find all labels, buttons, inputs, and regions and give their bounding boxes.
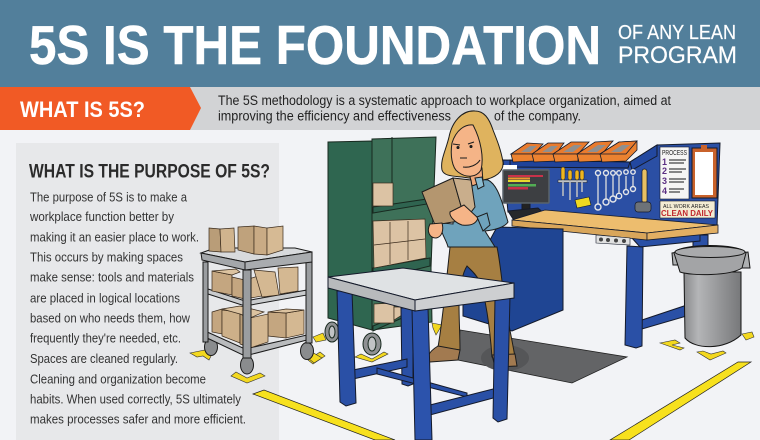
- definition text: The 5S methodology is a systematic approach to workplace organization, aimed at: [218, 93, 671, 108]
- workbench: [463, 141, 720, 348]
- shelf side panel: [328, 141, 372, 330]
- clipboard: [692, 145, 717, 198]
- subtitle: OF ANY LEAN: [618, 21, 736, 44]
- cart top shelf: [201, 248, 312, 270]
- process poster: 4: [662, 186, 667, 196]
- metal cart with boxes: [201, 226, 314, 374]
- pegboard: [503, 143, 720, 226]
- yellow floor corner markers: [190, 323, 754, 383]
- grey trash can: [672, 246, 750, 347]
- trousers: [438, 247, 515, 357]
- panel body text: are placed in logical locations: [30, 292, 180, 306]
- power strip: [596, 235, 630, 245]
- tape measure: [575, 197, 591, 208]
- panel body text: frequently they're needed, etc.: [30, 332, 181, 346]
- panel body text: making it an easier place to work.: [30, 230, 199, 244]
- process poster: [660, 147, 689, 199]
- title: 5S IS THE FOUNDATION: [29, 14, 601, 76]
- subtitle: [618, 21, 737, 69]
- keyboard: [508, 208, 547, 222]
- orange parts trays: [511, 141, 637, 162]
- cart casters: [204, 338, 314, 374]
- right cuff: [477, 213, 490, 231]
- yellow floor tape lines: [253, 362, 751, 440]
- cart lower shelf: [205, 331, 307, 356]
- computer monitor: [503, 165, 549, 210]
- neck: [469, 168, 483, 186]
- screwdrivers on rack: [558, 167, 587, 200]
- clean daily sign: ALL WORK AREAS: [663, 204, 709, 210]
- definition text: [218, 93, 671, 124]
- woman holding box: [422, 111, 517, 367]
- hammer: [635, 169, 651, 212]
- clean daily sign: CLEAN DAILY: [661, 209, 714, 218]
- cart lower shelf boxes: [212, 306, 304, 348]
- orange arrow label: [0, 87, 201, 130]
- can lid: [674, 246, 746, 275]
- cart top boxes: [209, 226, 283, 255]
- panel body text: habits. When used correctly, 5S ultimately: [30, 392, 242, 406]
- cart posts: [203, 262, 312, 358]
- panel heading: WHAT IS THE PURPOSE OF 5S?: [29, 162, 270, 182]
- face: [451, 125, 482, 176]
- definition text: improving the efficiency and effectiveness: [218, 108, 451, 124]
- blue bench cabinet: [463, 227, 563, 331]
- header banner: [0, 0, 760, 87]
- shoes: [428, 346, 517, 367]
- wrenches: [595, 170, 636, 210]
- panel body text: workplace function better by: [29, 210, 175, 224]
- shelf cardboard boxes: [373, 183, 426, 323]
- cart middle shelf: [208, 289, 307, 306]
- blue shirt: [442, 179, 508, 247]
- definition text: of the company.: [494, 108, 581, 124]
- collar: [475, 177, 484, 189]
- panel: purpose of 5S: [16, 143, 279, 440]
- floor mat: [458, 330, 627, 383]
- clean daily sign: [660, 201, 715, 218]
- shelf back: [372, 137, 436, 330]
- facial features: [453, 142, 480, 167]
- shelf casters: [325, 322, 381, 355]
- cart middle shelf boxes: [212, 267, 298, 299]
- panel body text: Spaces are cleaned regularly.: [30, 352, 178, 366]
- process poster: PROCESS: [662, 150, 687, 157]
- process poster: 3: [662, 176, 667, 186]
- front steel table: [328, 268, 514, 440]
- orange arrow label: WHAT IS 5S?: [20, 97, 145, 122]
- table back leg: [401, 308, 413, 386]
- table crossbars: [353, 359, 497, 415]
- green storage shelf: [325, 137, 436, 355]
- table top: [328, 268, 514, 311]
- wood bench top: [512, 210, 718, 240]
- panel body text: Cleaning and organization become: [30, 372, 206, 386]
- process poster: 1: [662, 157, 667, 167]
- what is 5S band: [0, 87, 760, 130]
- can body: [684, 272, 741, 347]
- hair: [442, 111, 503, 180]
- panel body text: This occurs by making spaces: [30, 250, 183, 264]
- panel body text: based on who needs them, how: [30, 312, 191, 326]
- panel body text: [29, 190, 246, 426]
- panel body text: makes processes safer and more efficient.: [30, 412, 246, 426]
- table legs: [337, 291, 510, 440]
- can handles: [672, 252, 750, 268]
- bench legs and brace: [625, 232, 708, 348]
- panel body text: The purpose of 5S is to make a: [30, 190, 187, 204]
- process poster: 2: [662, 166, 667, 176]
- hands: [428, 205, 478, 238]
- subtitle: PROGRAM: [618, 42, 737, 69]
- cardboard box held: [422, 178, 475, 225]
- panel body text: make sense: tools and materials: [30, 270, 194, 284]
